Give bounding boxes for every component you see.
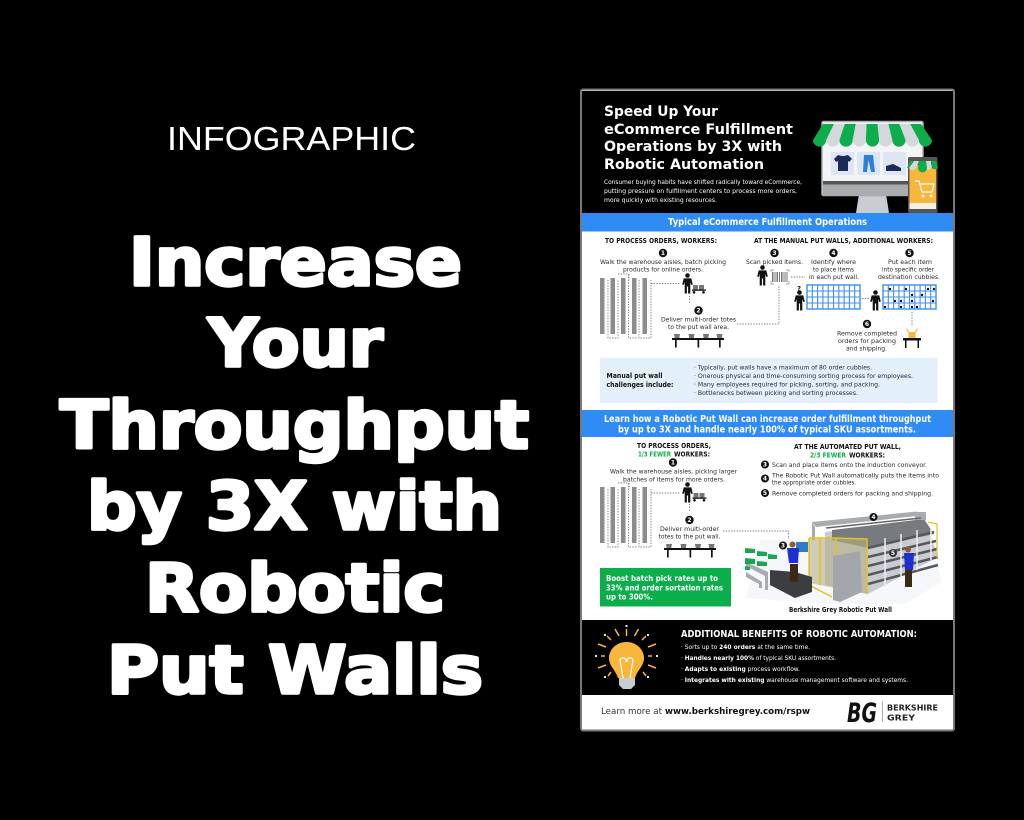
heading: one third fewer workers: 1/3 FEWER	[638, 450, 671, 458]
header title	[604, 104, 793, 173]
worker with larger cart	[651, 482, 706, 512]
step 4 typical: Identify where	[811, 258, 856, 266]
step 5 typical: into specific order	[882, 266, 934, 274]
step 2 automated	[658, 516, 720, 540]
benefits heading: ADDITIONAL BENEFITS OF ROBOTIC AUTOMATION:	[681, 629, 917, 640]
filled put wall grid	[883, 285, 936, 309]
benefits list	[681, 643, 908, 684]
main headline: Put Walls	[107, 632, 483, 709]
header intro text: Consumer buying habits have shifted radically toward eCommerce,	[604, 178, 802, 186]
panel: manual put wall challenges: Manual put wall	[606, 371, 662, 380]
puzzled worker: ?	[797, 285, 801, 293]
operator	[787, 542, 799, 582]
main headline: by 3X with	[87, 468, 502, 545]
step 1 typical: 1	[661, 250, 665, 257]
main headline: Throughput	[60, 387, 529, 464]
header title: Operations by 3X with	[604, 139, 782, 155]
illustration caption: Berkshire Grey Robotic Put Wall	[789, 606, 892, 614]
dotted path to induction	[723, 531, 788, 539]
dotted link between walls	[862, 298, 869, 300]
banner: robotic put wall	[582, 410, 953, 437]
logo: Berkshire Grey	[847, 698, 938, 729]
banner: robotic put wall: Learn how a Robotic Put Wall can increase order fulfillment throughput	[604, 414, 931, 425]
delivery table automated	[664, 544, 716, 558]
infographic card	[581, 90, 954, 730]
benefits list: · Handles nearly 100% of typical SKU assortments.	[681, 654, 836, 662]
panel: manual put wall challenges	[600, 358, 938, 403]
step 1 automated: 1	[671, 460, 675, 467]
banner: robotic put wall: by up to 3X and handle nearly 100% of typical SKU assortments.	[618, 424, 916, 436]
operator platform	[770, 570, 812, 598]
step 4 typical: to place items	[813, 266, 855, 274]
step 2 typical	[661, 306, 737, 331]
step 6 typical: and shipping.	[846, 344, 887, 352]
step 2 automated: 2	[687, 517, 692, 524]
icon: online storefront	[813, 122, 938, 213]
dotted path to barcode	[737, 286, 779, 324]
callout: boost rates: up to 300%.	[606, 592, 653, 602]
automated steps list: Scan and place items onto the induction conveyor.	[772, 461, 927, 469]
automated steps list: 3	[763, 462, 767, 469]
benefits list: · Integrates with existing warehouse management software and systems.	[681, 676, 908, 684]
automated steps list: Remove completed orders for packing and shipping.	[772, 490, 933, 498]
step 4 typical: 4	[831, 250, 836, 257]
step 1 typical: products for online orders.	[623, 266, 703, 274]
induction conveyor	[746, 562, 768, 590]
step 6 typical: 6	[865, 321, 869, 328]
main headline: Your	[207, 305, 383, 382]
benefits list: · Adapts to existing process workflow.	[681, 665, 800, 673]
gray machine panel	[833, 551, 862, 602]
step 3 typical: Scan picked items.	[746, 258, 803, 266]
step 3 typical	[746, 249, 803, 266]
yellow guard cage	[809, 538, 867, 594]
step 4 typical	[809, 249, 859, 281]
banner: typical operations: Typical eCommerce Fulfillment Operations	[668, 217, 867, 228]
callout: boost rates: 33% and order sortation rates	[606, 582, 723, 592]
main headline: Increase	[129, 224, 462, 301]
benefits list: · Sorts up to 240 orders at the same time.	[681, 643, 810, 651]
step 6 typical: orders for packing	[838, 337, 896, 345]
footer link	[601, 707, 810, 717]
step 2 typical: Deliver multi-order totes	[661, 316, 737, 324]
packing table with totes	[672, 334, 724, 348]
logo: Berkshire Grey: BG	[847, 698, 877, 729]
heading: two thirds fewer workers: AT THE AUTOMATED PUT WALL,	[794, 442, 901, 451]
heading: two thirds fewer workers: 2/3 FEWER	[810, 450, 846, 460]
step 2 typical: 2	[696, 308, 701, 315]
heading: to process orders: TO PROCESS ORDERS, WORKERS:	[605, 236, 717, 245]
callout: boost rates	[600, 568, 731, 606]
automated steps list: The Robotic Put Wall automatically puts the items into	[771, 472, 939, 480]
step 6 typical	[837, 320, 897, 352]
step 5 typical: destination cubbies.	[878, 273, 940, 281]
logo: Berkshire Grey: GREY	[887, 714, 915, 722]
header title: Speed Up Your	[604, 104, 719, 120]
header intro text: putting pressure on fulfillment centers to process more orders,	[604, 187, 797, 195]
footer link: www.berkshiregrey.com/rspw	[665, 707, 810, 717]
heading: one third fewer workers: TO PROCESS ORDERS,	[637, 441, 711, 450]
heading: one third fewer workers: WORKERS:	[674, 450, 710, 458]
worker sorting	[870, 290, 881, 310]
step 5 typical	[878, 249, 940, 281]
header intro text	[604, 178, 802, 204]
main headline: Robotic	[145, 550, 445, 627]
step 2 typical: to the put wall area.	[668, 323, 729, 331]
warehouse racks	[600, 274, 651, 338]
panel: manual put wall challenges: · Onerous physical and time-consuming sorting process for employees.	[694, 372, 913, 380]
logo: Berkshire Grey: BERKSHIRE	[887, 704, 938, 712]
illustration: robotic put wall: 4	[871, 514, 876, 521]
icon: light bulb	[595, 625, 658, 689]
shelving	[825, 520, 938, 594]
worker with cart	[651, 273, 706, 304]
step 1 typical	[600, 249, 726, 274]
header intro text: more quickly with existing resources.	[604, 196, 717, 204]
header title: eCommerce Fulfillment	[604, 122, 793, 138]
step 1 automated	[610, 458, 737, 484]
packing table with box	[903, 312, 921, 348]
heading: two thirds fewer workers	[794, 442, 901, 460]
step 1 typical: Walk the warehouse aisles, batch picking	[600, 258, 726, 266]
step 1 automated: batches of items for more orders.	[623, 476, 725, 484]
automated steps list	[761, 460, 939, 498]
automated steps list: 4	[763, 476, 767, 483]
heading: manual put walls: AT THE MANUAL PUT WALLS, ADDITIONAL WORKERS:	[754, 236, 933, 245]
illustration: robotic put wall: 3	[781, 543, 785, 550]
worker scanning	[757, 265, 768, 286]
step 4 typical: in each put wall.	[809, 273, 859, 281]
step 2 automated: totes to the put wall.	[658, 532, 720, 540]
step 1 automated: Walk the warehouse aisles, picking larger	[610, 468, 737, 476]
heading: one third fewer workers	[637, 441, 711, 458]
heading: two thirds fewer workers: WORKERS:	[849, 450, 885, 460]
header title: Robotic Automation	[604, 157, 764, 173]
panel: header	[582, 91, 953, 213]
illustration: robotic put wall: 5	[891, 550, 895, 557]
step 5 typical: Put each item	[888, 258, 932, 266]
icon: barcode	[771, 270, 805, 284]
empty put wall grid	[807, 285, 860, 309]
panel: manual put wall challenges: · Typically, put walls have a maximum of 80 order cubbies.	[694, 364, 872, 372]
panel: additional benefits	[582, 620, 953, 695]
callout: boost rates: Boost batch pick rates up to	[606, 573, 718, 583]
step 3 typical: 3	[772, 250, 777, 257]
puzzled worker	[794, 285, 805, 310]
warehouse racks automated	[600, 483, 651, 547]
step 6 typical: Remove completed	[837, 330, 897, 338]
gantry	[812, 512, 926, 540]
illustration: robotic put wall	[745, 512, 942, 604]
infographic label: INFOGRAPHIC	[167, 120, 416, 157]
panel: manual put wall challenges: · Many employees required for picking, sorting, and packing.	[694, 380, 880, 388]
automated steps list: 5	[763, 490, 767, 497]
banner: typical operations	[582, 213, 953, 232]
automated steps list: the appropriate order cubbies.	[772, 478, 856, 486]
panel: manual put wall challenges: · Bottlenecks between picking and sorting processes.	[694, 389, 858, 397]
main headline	[60, 224, 529, 709]
second worker	[904, 546, 914, 587]
footer link: Learn more at	[601, 707, 663, 717]
step 5 typical: 5	[907, 250, 912, 257]
panel: manual put wall challenges: challenges include:	[606, 380, 674, 389]
step 2 automated: Deliver multi-order	[660, 525, 719, 533]
